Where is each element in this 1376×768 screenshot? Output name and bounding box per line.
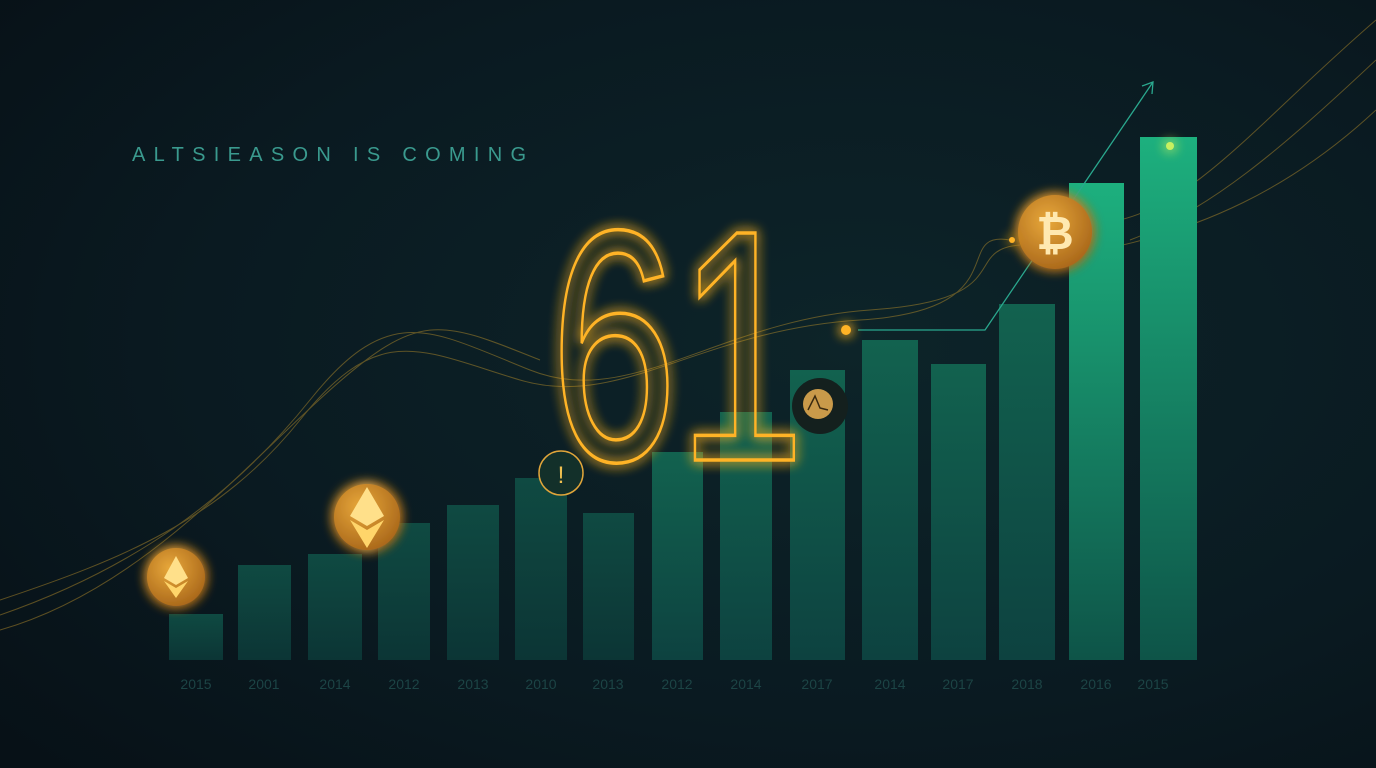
year labels: 2012 (388, 676, 420, 692)
coin: outlined token: ! (558, 462, 564, 489)
year labels: 2013 (457, 676, 489, 692)
title: ALTSIEASON IS COMING (132, 144, 534, 166)
coin: ethereum large (334, 484, 400, 550)
coin: dark token (792, 378, 848, 434)
trend arrow (858, 82, 1153, 330)
year labels: 2015 (1137, 676, 1169, 692)
coin: bitcoin (1018, 195, 1092, 269)
gold wave lines (0, 20, 1376, 630)
coin: bitcoin: ₿ (1036, 207, 1074, 259)
year labels: 2017 (801, 676, 833, 692)
year labels: 2015 (180, 676, 212, 692)
coin: outlined token (539, 451, 583, 495)
year labels: 2017 (942, 676, 974, 692)
year labels: 2014 (730, 676, 762, 692)
year labels: 2010 (525, 676, 557, 692)
glowing dots (841, 142, 1174, 335)
year labels: 2016 (1080, 676, 1112, 692)
year labels: 2012 (661, 676, 693, 692)
bar chart (169, 137, 1197, 660)
year labels: 2018 (1011, 676, 1043, 692)
coin: ethereum small (147, 548, 205, 606)
year labels: 2014 (874, 676, 906, 692)
year labels: 2001 (248, 676, 280, 692)
big number 61: 61 (550, 161, 805, 530)
year labels: 2014 (319, 676, 351, 692)
year labels (180, 676, 1169, 692)
year labels: 2013 (592, 676, 624, 692)
